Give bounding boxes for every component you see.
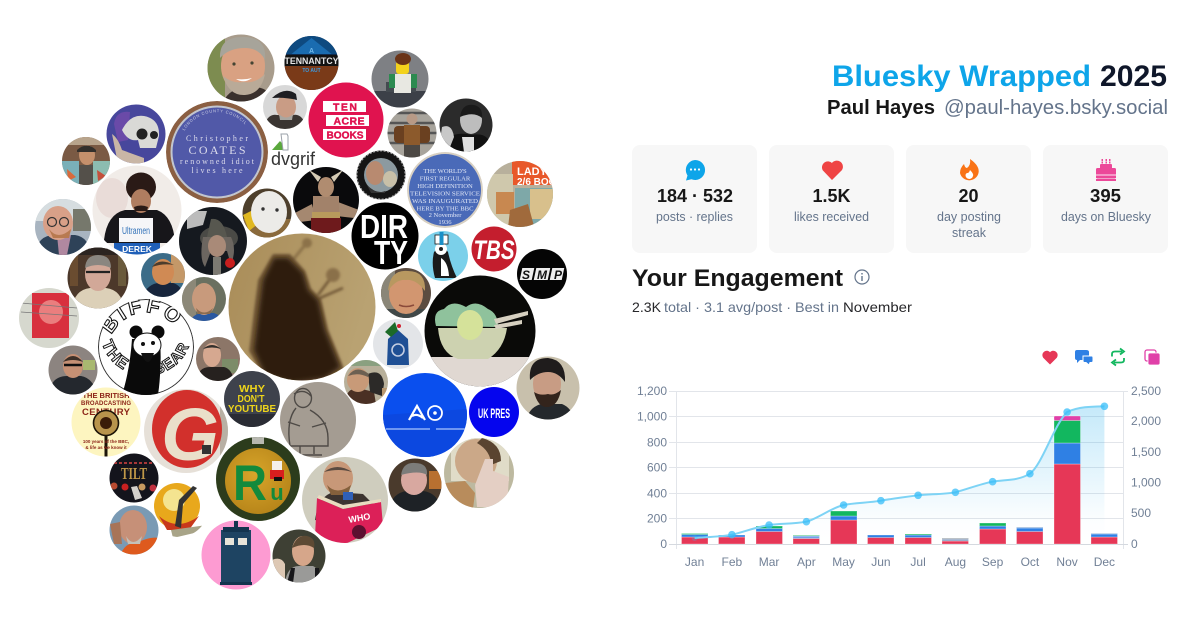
avatar: Ten Acre Books logo [308,82,384,158]
avatar: Christopher Coates blue plaque: Christopher [186,134,248,143]
avatar: penguin logo with gift [418,231,468,281]
profile name and handle [827,97,1168,119]
avatar: The British Broadcasting Century: CENTURY [82,407,131,418]
cumulative area fill [695,406,1104,544]
avatar: TBS logo [471,226,517,272]
avatar: Christopher Coates blue plaque: lives here [192,166,243,175]
right axis labels: 500 [1131,506,1151,520]
icon: cake [1096,159,1116,181]
avatar: UK PRES logo: UK PRES [478,405,510,421]
avatar: bald man in orange [109,505,159,555]
avatar: BBC television service blue plaque: FIRST REGULAR [420,176,471,182]
panel: avatar bubble cluster [19,34,580,590]
profile name and handle: @paul-hayes.bsky.social [944,97,1168,119]
month labels: Sep [982,555,1004,569]
right axis labels [1131,384,1161,551]
panel: days on Bluesky stat: 395 [1090,186,1121,206]
chart legend icons [1043,348,1160,366]
avatar: man reading Doctor Who book: WHO [348,511,371,525]
avatar: A Tennantcy logo: TENNANTCY [284,56,338,66]
month labels: Jul [910,555,926,569]
avatar: Ladybird books [487,161,557,228]
avatar: witch in grey hat [179,207,247,275]
avatar: bald man outdoors [182,277,226,321]
avatar: AO logo [383,373,467,457]
right axis labels: 1,000 [1131,476,1161,490]
month labels: Nov [1056,555,1078,569]
avatar: BBC television service blue plaque: HIGH DEFINITION [417,183,473,190]
avatar: Biffo the Bear logo [98,299,194,395]
avatar: Derek with whiteboard: DEREK [122,244,153,254]
avatar: Biffo the Bear logo: BIFFO [102,299,181,334]
avatar: A Tennantcy logo: A [309,48,314,55]
avatar: Ru Christmas bauble [216,437,300,521]
avatar: Derek with whiteboard: Ultramen [122,226,150,237]
avatar: broken image with dvgrif alt text: dvgrif [271,149,316,169]
line points [692,402,1108,541]
avatar: Why Don't YouTube logo: WHY [239,383,265,395]
month labels [685,555,1115,569]
avatar: red stamp [19,288,79,348]
avatar: smiling grey-haired man [207,34,275,102]
panel: day posting streak stat: 20 [958,186,979,206]
avatar: Ten Acre Books logo: ACRE [334,115,364,127]
avatar: viking costume [293,167,359,234]
avatar: Christopher Coates blue plaque [166,101,268,203]
left axis labels: 0 [660,537,667,551]
left axis labels: 1,200 [637,384,667,398]
avatar: BBC television service blue plaque: HERE BY THE BBC [417,206,474,212]
avatar: UK PRES logo [469,387,519,437]
avatar: man in dark jumper [388,458,442,512]
grid lines [669,391,1128,549]
avatar: A Tennantcy logo [284,36,338,90]
avatar: Ru Christmas bauble: R [233,455,267,511]
avatar: BBC television service blue plaque: 2 November [429,212,462,219]
avatar: plush white alien [242,188,292,239]
icon: flame [960,159,979,180]
avatar: SMP logo: SMP [522,268,563,282]
avatar: BBC television service blue plaque: WAS INAUGURATED [412,198,478,205]
left axis labels [637,384,667,551]
icon: info [855,270,869,284]
right axis labels: 2,000 [1131,414,1161,428]
left axis labels: 400 [647,486,667,500]
left axis labels: 600 [647,460,667,474]
panel: posts and replies stat: 184 · 532 [657,186,733,206]
month labels: May [832,555,855,569]
engagement summary line [632,299,912,315]
avatar: Dirty logo [351,202,419,271]
avatar: man holding comics [62,137,110,185]
icon: legend reposts [1112,348,1124,366]
avatar: BBC television service blue plaque: 1936 [438,219,452,226]
panel: likes received stat [769,145,894,253]
avatar: man in floral shirt [141,253,185,297]
avatar: skull held in hand [106,104,166,164]
month labels: Apr [797,555,816,569]
icon: legend replies [1075,350,1093,365]
avatar: Biffo the Bear logo: THE [102,338,130,370]
panel: posts and replies stat [632,145,757,253]
month labels: Mar [759,555,779,569]
avatar: The British Broadcasting Century [71,387,141,457]
month labels: Feb [722,555,743,569]
icon: heart [822,161,843,180]
month labels: Jun [871,555,891,569]
avatar: BBC television service blue plaque: THE WORLD'S [423,168,467,175]
month labels: Jan [685,555,704,569]
avatar: man in black cap [263,85,307,129]
bars [682,416,1118,544]
avatar: Ladybird books: LADY [517,166,548,178]
avatar: Christopher Coates blue plaque: LONDON COUNTY COUNCIL [182,109,246,130]
avatar: bald man with round glasses [35,199,91,255]
avatar: podcast badge with two men [356,150,406,200]
avatar: Ten Acre Books logo: BOOKS [326,129,364,141]
right axis labels: 0 [1131,537,1138,551]
avatar: TBS logo: TBS [474,235,514,265]
avatar: Christopher Coates blue plaque: renowned idiot [180,157,255,166]
avatar: thumbs up man [444,438,514,509]
left axis labels: 200 [647,512,667,526]
avatar: man in orange check shirt [387,108,437,159]
panel: likes received stat: 1.5K [812,186,850,206]
month labels: Aug [945,555,966,569]
avatar: Dirty logo: DIR [360,208,408,245]
avatar: red G sign: G [161,393,219,476]
avatar: Dalek shadow silhouette [228,233,376,385]
avatar: TILT christmas logo [109,453,159,503]
avatar: man reading Doctor Who book [302,457,388,546]
month labels: Oct [1021,555,1040,569]
panel: days on Bluesky stat [1043,145,1168,253]
month labels: Dec [1094,555,1115,569]
avatar: Why Don't YouTube logo [224,371,280,427]
panel: day posting streak stat: streak [952,226,987,240]
engagement summary line: total · 3.1 avg/post · Best in [664,299,839,315]
engagement summary line: 2.3K [632,299,662,315]
cumulative line [695,406,1104,538]
avatar: TILT christmas logo: TILT [121,464,147,483]
avatar: Why Don't YouTube logo: DON'T [238,393,265,405]
avatar: broken image with dvgrif alt text [271,134,316,169]
avatar: man in cream jumper [67,247,129,309]
avatar: blond man [381,268,431,319]
right axis labels: 1,500 [1131,445,1161,459]
avatar: man in glasses at desk [48,345,98,395]
avatar: The British Broadcasting Century: THE BRITISH [82,391,130,400]
avatar: Ru Christmas bauble: u [270,480,284,505]
left axis labels: 1,000 [637,410,667,424]
avatar: lego figure [371,50,429,109]
avatar: holly tag logo [373,319,423,369]
panel: posts and replies stat: posts · replies [656,210,733,224]
avatar: The British Broadcasting Century: BROADCASTING [81,401,131,407]
avatar: Derek with whiteboard [92,165,182,255]
avatar: sketched figure on grey [280,382,356,458]
avatar: man in t-shirt with robot [196,337,240,381]
avatar: The British Broadcasting Century: & life as we know it [85,445,127,450]
icon: legend quotes [1145,350,1160,365]
avatar: Christopher Coates blue plaque: COATES [188,143,246,157]
panel: days on Bluesky stat: days on Bluesky [1061,210,1152,224]
avatar: smiling man in grey t-shirt [272,529,326,583]
avatar: Dirty logo: TY [374,234,408,271]
avatar: Ladybird books: 2/6 BOO [517,177,557,188]
avatar: BBC television service blue plaque: TELEVISION SERVICE [410,190,480,198]
avatar: Biffo the Bear logo: BEAR [160,342,190,374]
avatar: doc bauble [154,483,207,538]
avatar: bearded man with dark hair [516,356,580,420]
avatar: The British Broadcasting Century: 100 years of the BBC, [83,439,129,444]
panel: day posting streak stat: day posting [937,210,1001,224]
avatar: Why Don't YouTube logo: YOUTUBE [228,403,276,415]
right axis labels: 2,500 [1131,384,1161,398]
profile name and handle: Paul Hayes [827,97,935,119]
avatar: red G sign [144,389,228,476]
avatar: black and white portrait [439,98,493,152]
left axis labels: 800 [647,436,667,450]
avatar: BBC television service blue plaque [407,152,483,228]
panel: day posting streak stat [906,145,1031,253]
heading: Your Engagement: Your Engagement [632,265,843,292]
avatar: Ten Acre Books logo: TEN [333,101,357,113]
avatar: A Tennantcy logo: TO AUT [302,68,321,74]
panel: likes received stat: likes received [794,210,869,224]
avatar: glass salad bowl painting [424,275,536,389]
title: Bluesky Wrapped [832,60,1091,93]
title: 2025 [1100,60,1167,93]
avatar: man with cat [344,360,390,404]
icon: chat bubble [686,160,705,180]
avatar: blue TARDIS on pink [201,520,271,590]
avatar: SMP logo [517,249,567,299]
icon: legend heart [1043,351,1057,364]
chart: monthly engagement stacked bars with cumulative line [637,384,1161,569]
engagement summary line: November [843,299,912,315]
